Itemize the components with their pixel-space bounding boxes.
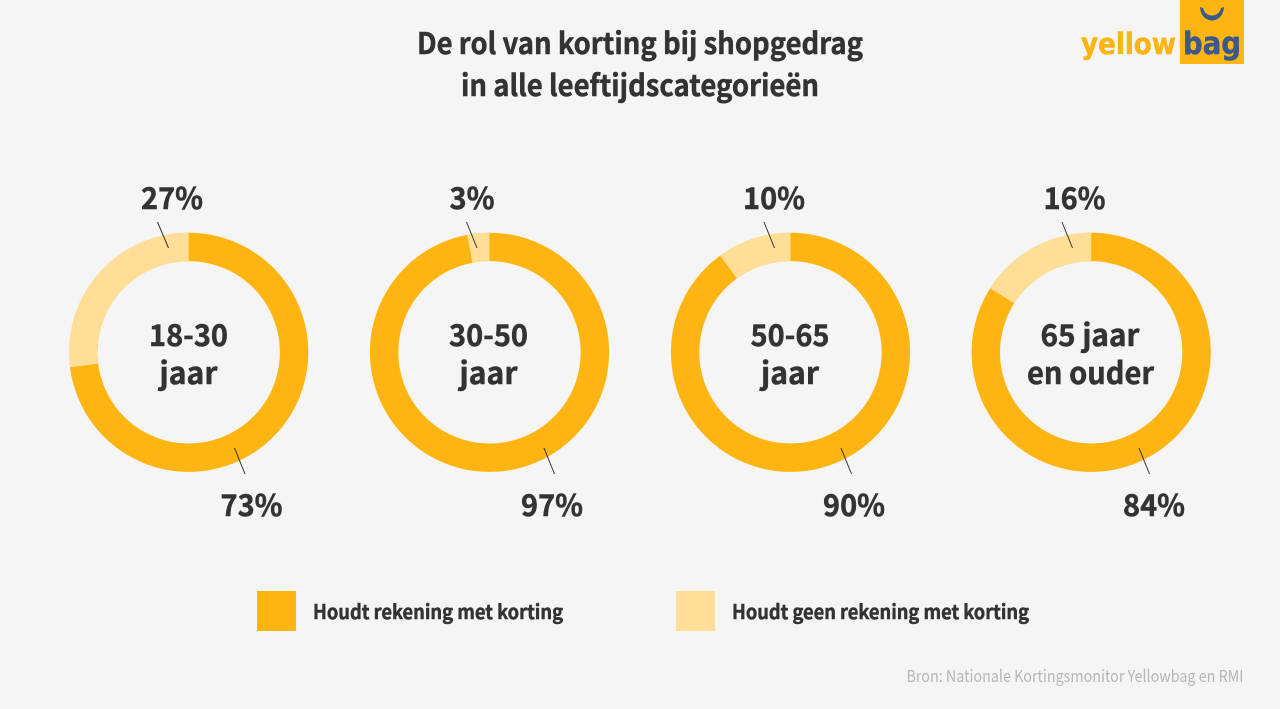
title: in alle leeftijdscategorieën: [461, 63, 819, 105]
donut: 18-30 jaar: 73%: [220, 481, 282, 525]
legend: houdt rekening met korting: Houdt rekening met korting: [313, 596, 563, 625]
donut: 50-65 jaar: jaar: [759, 349, 820, 393]
donut: 30-50 jaar: 30-50: [449, 311, 528, 355]
donut: 65 jaar en ouder: 65 jaar: [1040, 311, 1140, 355]
donut: 50-65 jaar: 50-65: [750, 311, 830, 355]
legend: houdt rekening met korting: [257, 591, 563, 631]
donut: 18-30 jaar: 27%: [141, 174, 203, 218]
logo: yellowbag: bag: [1183, 26, 1241, 62]
logo: yellowbag: yellow: [1081, 27, 1176, 61]
legend: houdt geen rekening met korting: [676, 591, 1029, 631]
legend: houdt geen rekening met korting: Houdt geen rekening met korting: [732, 596, 1029, 625]
donut: 30-50 jaar: [384, 174, 595, 525]
donut: 50-65 jaar: 90%: [823, 481, 885, 525]
logo: yellowbag: [1081, 0, 1244, 64]
donut: 65 jaar en ouder: 16%: [1044, 174, 1106, 218]
donut: 50-65 jaar: [685, 174, 896, 525]
donut: 30-50 jaar: 3%: [450, 174, 494, 218]
donut: 30-50 jaar: jaar: [457, 349, 518, 393]
donut: 18-30 jaar: 18-30: [149, 311, 228, 355]
donut: 30-50 jaar: 97%: [521, 481, 583, 525]
donut: 18-30 jaar: [83, 174, 294, 525]
title: De rol van korting bij shopgedrag: [417, 21, 863, 63]
title: [417, 21, 863, 105]
donut: 65 jaar en ouder: en ouder: [1027, 349, 1155, 393]
donut: 65 jaar en ouder: 84%: [1123, 481, 1185, 525]
donut: 18-30 jaar: jaar: [157, 349, 218, 393]
donut: 65 jaar en ouder: [986, 174, 1197, 525]
donut: 50-65 jaar: 10%: [743, 174, 805, 218]
